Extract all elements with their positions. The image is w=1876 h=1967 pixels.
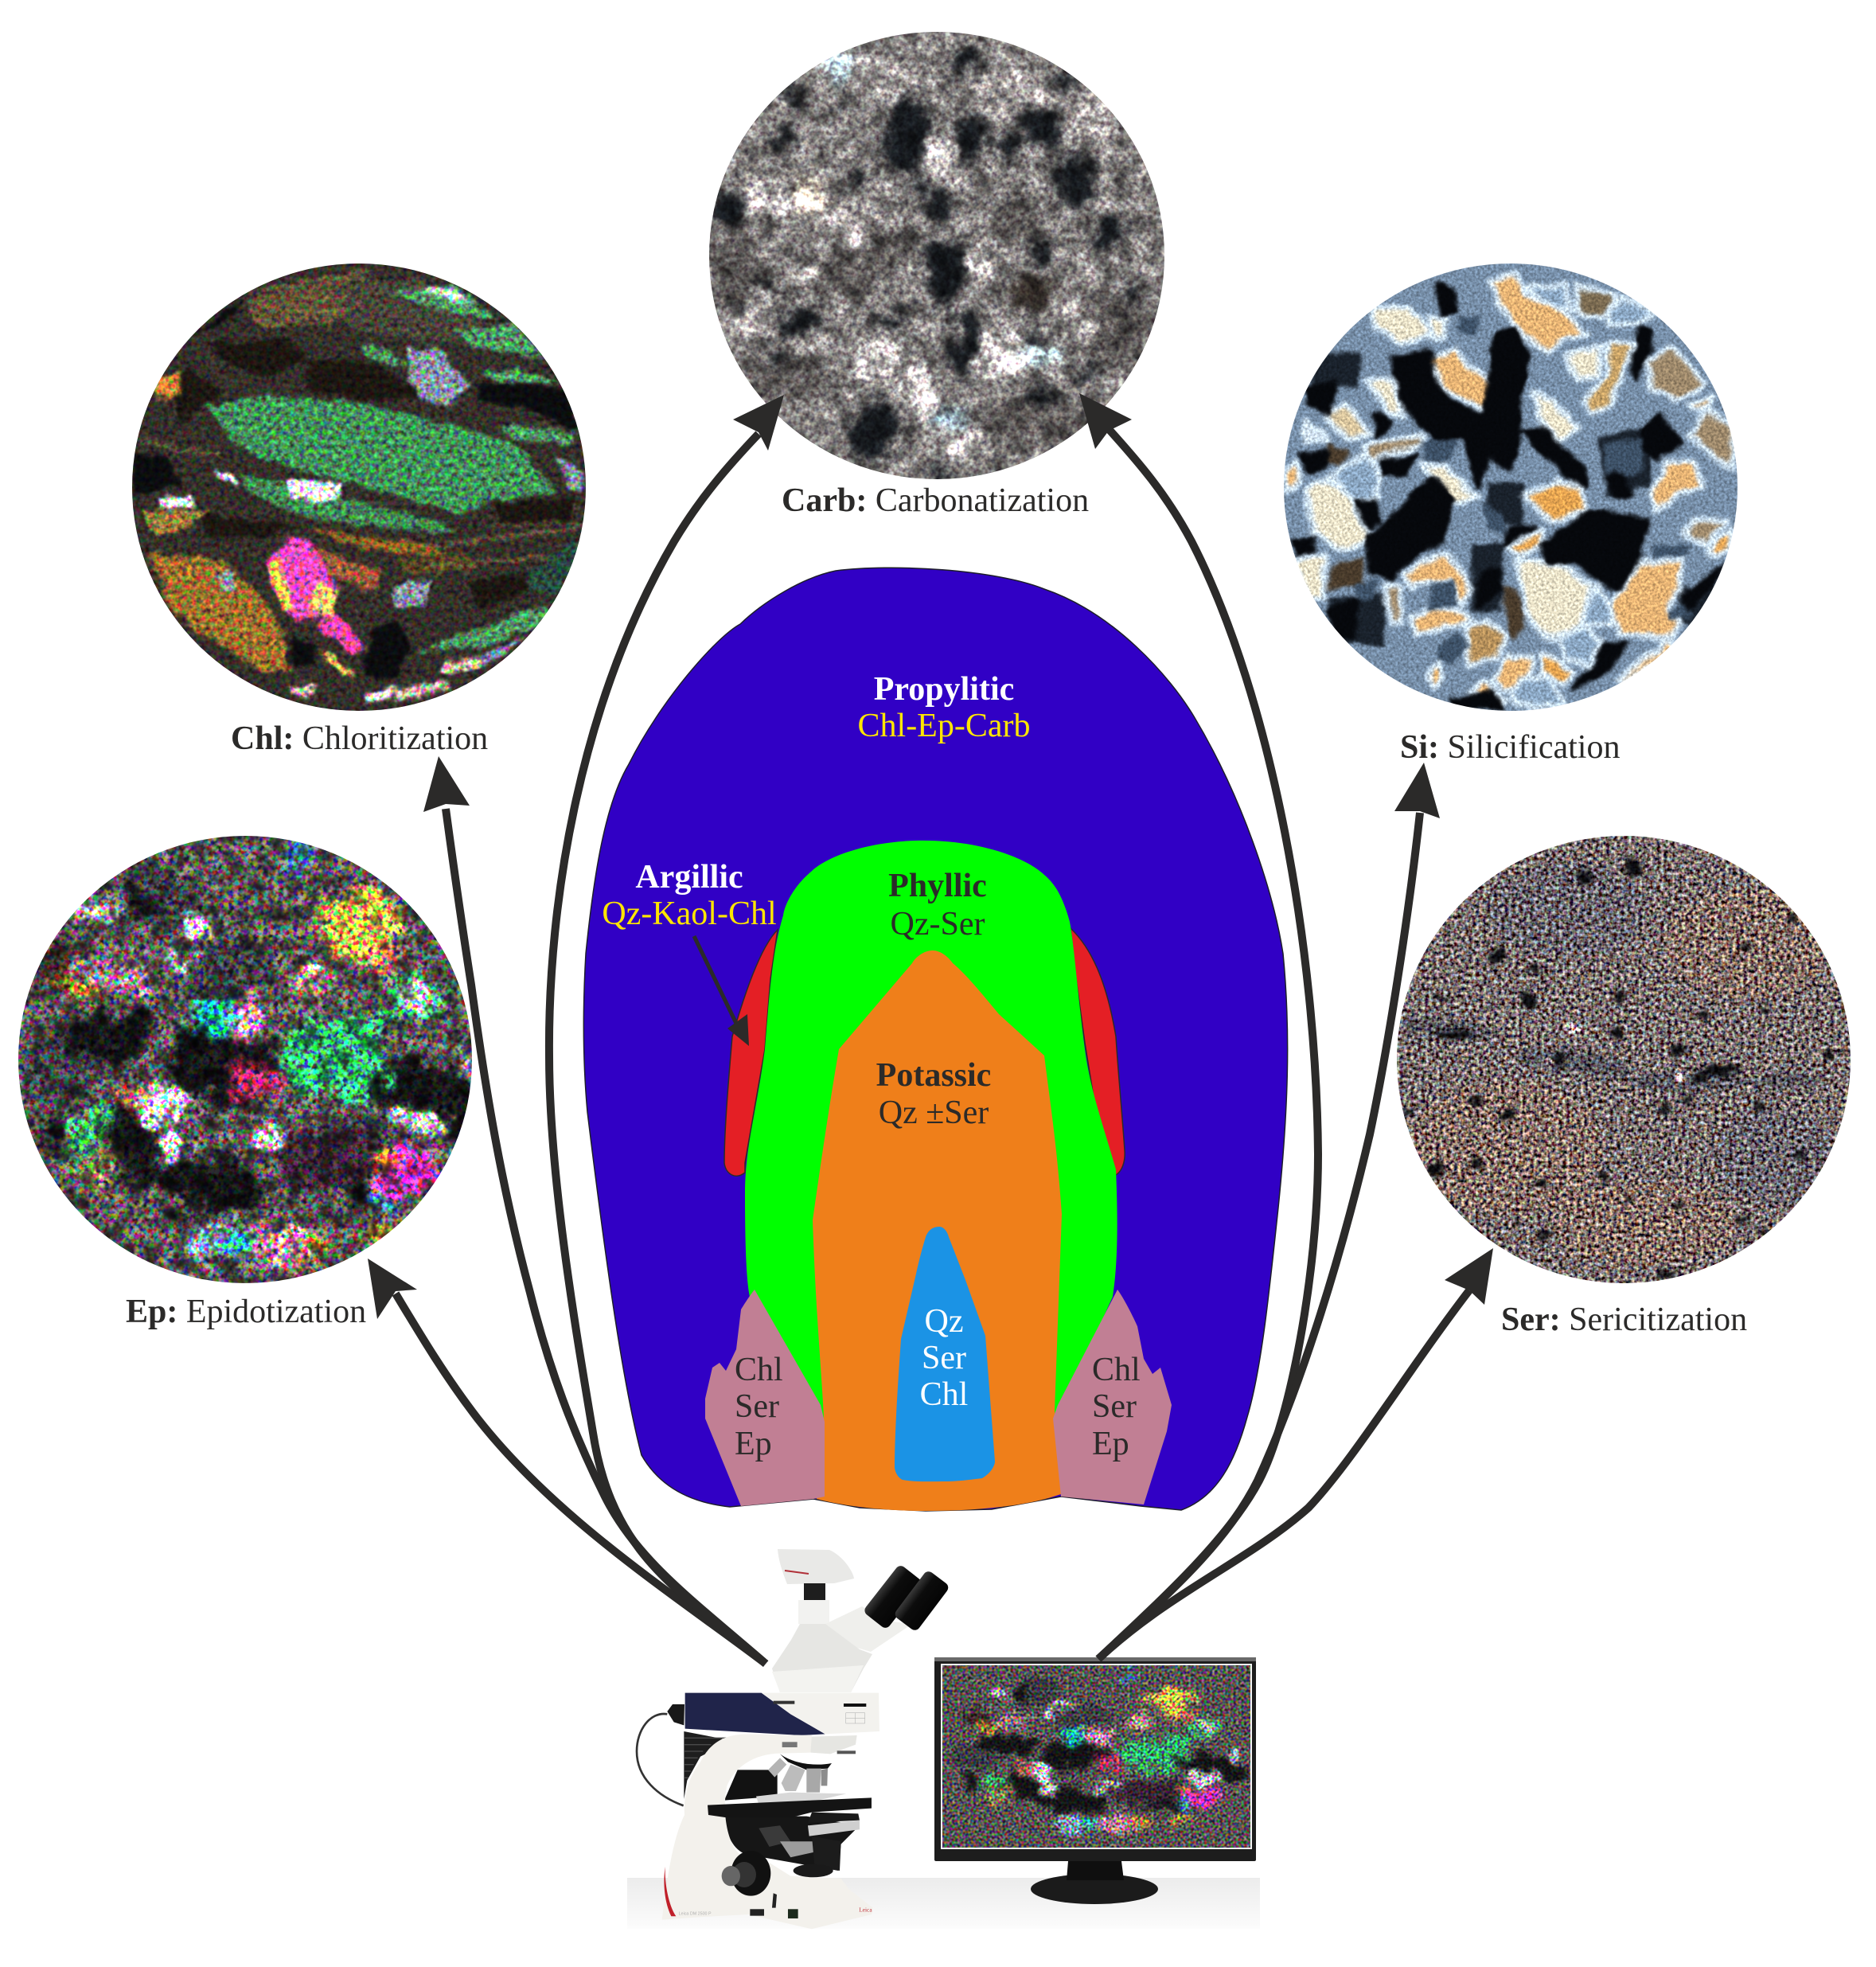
monitor stand: [1031, 1861, 1158, 1904]
label: argillic minerals: Qz-Kaol-Chl: [602, 896, 777, 932]
label: potassic: Potassic: [876, 1057, 991, 1094]
zone: potassic: [813, 950, 1062, 1511]
alteration zoning diagram: [583, 568, 1288, 1511]
monitor screen image: [942, 1665, 1250, 1848]
label: right lobe minerals: Ser: [1092, 1388, 1137, 1425]
label: core minerals: Chl: [920, 1376, 968, 1413]
label: argillic: Argillic: [635, 859, 743, 896]
zone: argillic left: [724, 930, 778, 1176]
caption: epidotization: Ep: Epidotization: [126, 1294, 366, 1330]
arrows from microscope to thin sections: [368, 393, 1493, 1664]
caption: sericitization: Ser: Sericitization: [1501, 1302, 1747, 1338]
label: right lobe minerals: Chl: [1092, 1352, 1141, 1388]
label: left lobe minerals: Ser: [735, 1388, 779, 1425]
arrow: to silicification: [1098, 763, 1440, 1659]
zone: central core: [895, 1227, 995, 1481]
label: phyllic: Phyllic: [888, 868, 987, 904]
microscope stand: Leica: [859, 1907, 872, 1914]
zone: left outer lobe: [705, 1290, 825, 1506]
zone: right outer lobe: [1053, 1290, 1172, 1505]
microscope stand: Leica DM 2500 P: [679, 1912, 712, 1917]
arrow: to epidotization: [368, 1259, 766, 1664]
label: phyllic minerals: Qz-Ser: [891, 906, 985, 943]
arrow: to carbonatization from right: [1079, 393, 1318, 1659]
microscope: [627, 1549, 1260, 1929]
monitor: [922, 1653, 1270, 1904]
label: core minerals: Ser: [922, 1340, 966, 1376]
thin section: carbonatization: [709, 32, 1164, 479]
microscope stand: [637, 1693, 879, 1929]
monitor bezel: [934, 1657, 1256, 1861]
zone: phyllic: [745, 841, 1117, 1433]
arrow: argillic pointer: [694, 936, 749, 1046]
caption: carbonatization: Carb: Carbonatization: [782, 482, 1089, 519]
microscope head and camera: [772, 1549, 950, 1692]
thin section: sericitization: [1397, 836, 1851, 1283]
thin section: epidotization: [18, 836, 472, 1283]
label: right lobe minerals: Ep: [1092, 1426, 1129, 1462]
caption: chloritization: Chl: Chloritization: [231, 720, 488, 757]
floor surface: [627, 1878, 1260, 1929]
arrow: to chloritization: [423, 756, 766, 1664]
label: propylitic minerals: Chl-Ep-Carb: [858, 708, 1030, 744]
thin section: chloritization: [132, 263, 586, 711]
label: left lobe minerals: Chl: [735, 1352, 783, 1388]
label: core minerals: Qz: [925, 1303, 963, 1340]
label: propylitic: Propylitic: [874, 671, 1014, 708]
arrow: to sericitization: [1098, 1248, 1493, 1659]
icon: eyepieces: [863, 1563, 950, 1633]
zone: argillic right: [1071, 928, 1125, 1176]
zone: propylitic: [583, 568, 1288, 1511]
label: left lobe minerals: Ep: [735, 1426, 772, 1462]
arrow: to carbonatization from left: [549, 395, 784, 1664]
thin section: silicification: [1284, 263, 1738, 711]
label: potassic minerals: Qz ±Ser: [879, 1095, 989, 1131]
caption: silicification: Si: Silicification: [1400, 729, 1620, 766]
